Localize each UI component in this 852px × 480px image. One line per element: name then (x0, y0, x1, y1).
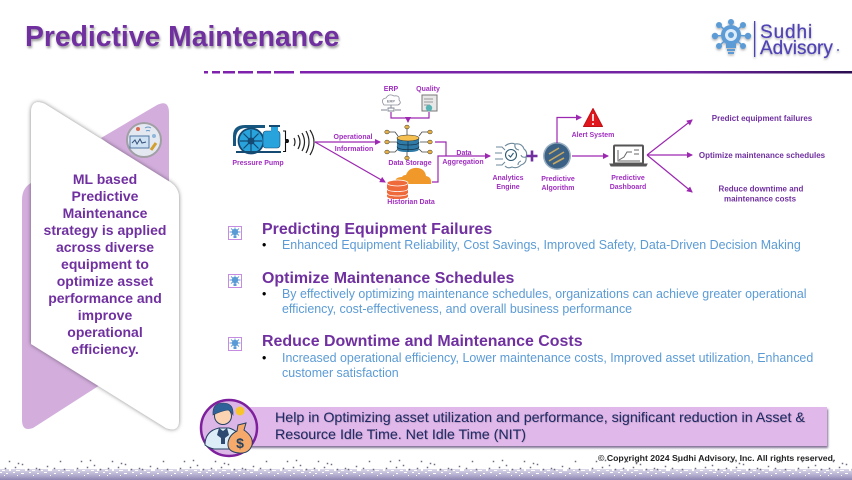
label: alert system: Alert System (572, 132, 614, 139)
label: data aggregation: Aggregation (442, 159, 484, 166)
section: predicting equipment failures (228, 221, 801, 252)
text: ML strategy: improve (78, 307, 132, 323)
text: ML strategy: ML based (73, 171, 137, 187)
outcome labels: Predict equipment failures (712, 114, 813, 123)
process flow diagram (232, 86, 826, 206)
callout text: Resource Idle Time. Net Idle Time (NIT) (275, 427, 526, 443)
section: reduce downtime and maintenance costs (228, 333, 813, 380)
icon: pressure pump (233, 125, 289, 154)
label: operational information (334, 134, 373, 153)
icon: signal waves (294, 130, 314, 155)
icon: bulb badge (228, 274, 242, 288)
label: predictive dashboard: Dashboard (610, 184, 646, 191)
text: ML strategy: operational (67, 324, 143, 340)
text: ML strategy: efficiency. (71, 341, 139, 357)
icon: worker with money bag: $ (236, 435, 244, 451)
icon: data storage (385, 125, 432, 160)
section: reduce downtime and maintenance costs: • (262, 351, 266, 365)
bullet text: Enhanced Equipment Reliability, Cost Savings, Improved Safety, Data-Driven Decision Making (282, 238, 801, 252)
label: predictive dashboard (610, 175, 646, 191)
label: data aggregation: Data (456, 150, 472, 157)
arrow: data aggregation (432, 142, 490, 182)
text: ML strategy: optimize asset (57, 273, 153, 289)
icon: historian data (387, 168, 431, 199)
outcome labels (699, 114, 826, 204)
icon: worker with money bag (200, 398, 258, 458)
outcome labels: Optimize maintenance schedules (699, 151, 826, 160)
heading: Reduce Downtime and Maintenance Costs (262, 333, 583, 350)
left panel shape (22, 100, 182, 432)
icon: monitoring badge (126, 122, 162, 158)
icon: bulb badge (228, 337, 242, 351)
panel: ML strategy (22, 100, 182, 432)
section: optimize maintenance schedules (228, 270, 807, 316)
label: analytics engine: Analytics (492, 175, 524, 182)
bullet text: efficiency, cost-effectiveness, and overall business performance (282, 302, 632, 316)
ERP source: ERP (387, 98, 395, 104)
section: predicting equipment failures: • (262, 238, 266, 252)
label: historian data: Historian Data (387, 199, 435, 206)
logo: Sudhi Advisory: Sudhi (760, 22, 813, 43)
copyright: © Copyright 2024 Sudhi Advisory, Inc. All rights reserved. (598, 453, 835, 463)
text: ML strategy (44, 171, 166, 357)
icon: predictive dashboard (610, 146, 647, 166)
label: predictive dashboard: Predictive (611, 175, 645, 182)
text: ML strategy: Maintenance (63, 205, 147, 221)
Quality source (416, 86, 440, 111)
label: predictive algorithm: Algorithm (541, 185, 575, 192)
logo: Sudhi Advisory: Advisory (760, 38, 833, 59)
text: ML strategy: across diverse (56, 239, 154, 255)
ERP source (381, 86, 401, 111)
section: optimize maintenance schedules: • (262, 287, 266, 301)
callout text: Help in Optimizing asset utilization and performance, significant reduction in Asset & (275, 410, 805, 426)
Quality source: Quality (416, 86, 440, 93)
arrow: to alert system (557, 118, 581, 143)
heading: Optimize Maintenance Schedules (262, 270, 514, 287)
label: pressure pump: Pressure Pump (232, 160, 284, 167)
bullet text: customer satisfaction (282, 366, 399, 380)
label: operational information: Operational (334, 134, 372, 141)
outcome labels: Reduce downtime and (719, 184, 804, 194)
outcome labels: maintenance costs (724, 194, 797, 204)
logo: Sudhi Advisory (710, 19, 840, 61)
footer dotted band (0, 460, 852, 480)
arrows: outcomes (647, 120, 692, 192)
label: operational information: Information (335, 146, 373, 153)
label: data storage: Data Storage (388, 160, 432, 167)
arrows: operational information (315, 142, 385, 182)
title: Predictive Maintenance (25, 20, 340, 52)
text: ML strategy: strategy is applied (44, 222, 166, 238)
callout banner (240, 407, 827, 446)
icon: analytics engine (495, 143, 527, 168)
bullet text: By effectively optimizing maintenance schedules, organizations can achieve greater operational (282, 287, 807, 301)
label: analytics engine: Engine (496, 184, 520, 191)
label: analytics engine (492, 175, 524, 191)
label: predictive algorithm: Predictive (541, 176, 575, 183)
icon: alert triangle (584, 108, 602, 126)
text: ML strategy: equipment to (61, 256, 149, 272)
bullet text (262, 287, 807, 316)
ERP source: ERP (384, 86, 399, 93)
text: ML strategy: performance and (48, 290, 162, 306)
bullet text: Increased operational efficiency, Lower maintenance costs, Improved asset utilization, Enhanced (282, 351, 813, 365)
text: ML strategy: Predictive (72, 188, 138, 204)
connector: sources to storage (391, 112, 429, 122)
header rule (204, 71, 852, 74)
arrow: to dashboard (572, 155, 608, 157)
label: data aggregation (442, 150, 484, 166)
icon: bulb badge (228, 226, 242, 240)
callout text (275, 410, 806, 443)
heading: Predicting Equipment Failures (262, 221, 492, 238)
icon: predictive algorithm (543, 142, 571, 170)
plus sign (526, 150, 538, 162)
label: predictive algorithm (541, 176, 575, 192)
bullet text (262, 351, 813, 380)
